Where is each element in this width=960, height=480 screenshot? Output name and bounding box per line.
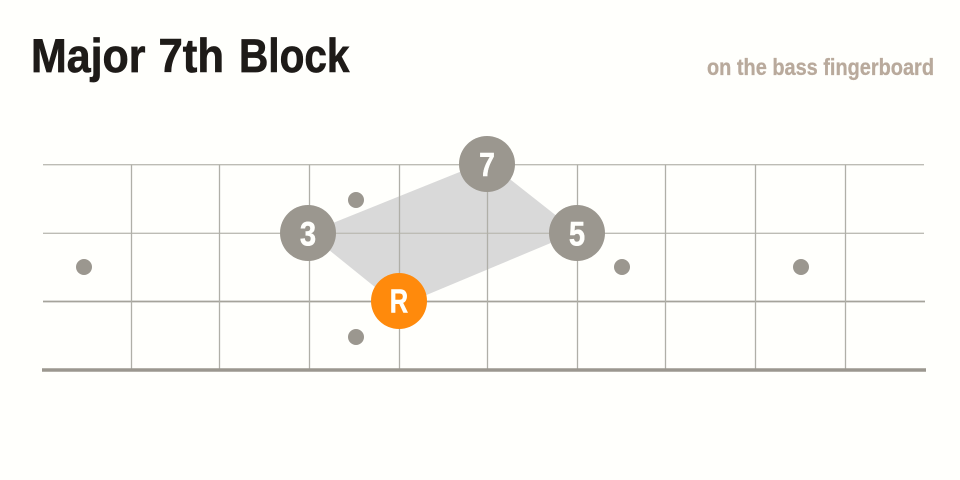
- block shape connecting the notes: [308, 161, 577, 306]
- title: [31, 29, 350, 82]
- note: major seventh: [459, 136, 515, 192]
- fingerboard grid: [42, 165, 926, 370]
- fret position markers: [76, 192, 809, 345]
- title: 7th: [158, 29, 224, 82]
- title: Block: [239, 29, 350, 82]
- note: root: [371, 273, 427, 329]
- note: major third: [280, 205, 336, 261]
- note: fifth: 5: [569, 214, 585, 253]
- note: major third: 3: [300, 214, 316, 253]
- note: fifth: [549, 205, 605, 261]
- note: major seventh: 7: [479, 146, 495, 184]
- title: Major: [31, 29, 146, 82]
- note: root: R: [390, 283, 408, 321]
